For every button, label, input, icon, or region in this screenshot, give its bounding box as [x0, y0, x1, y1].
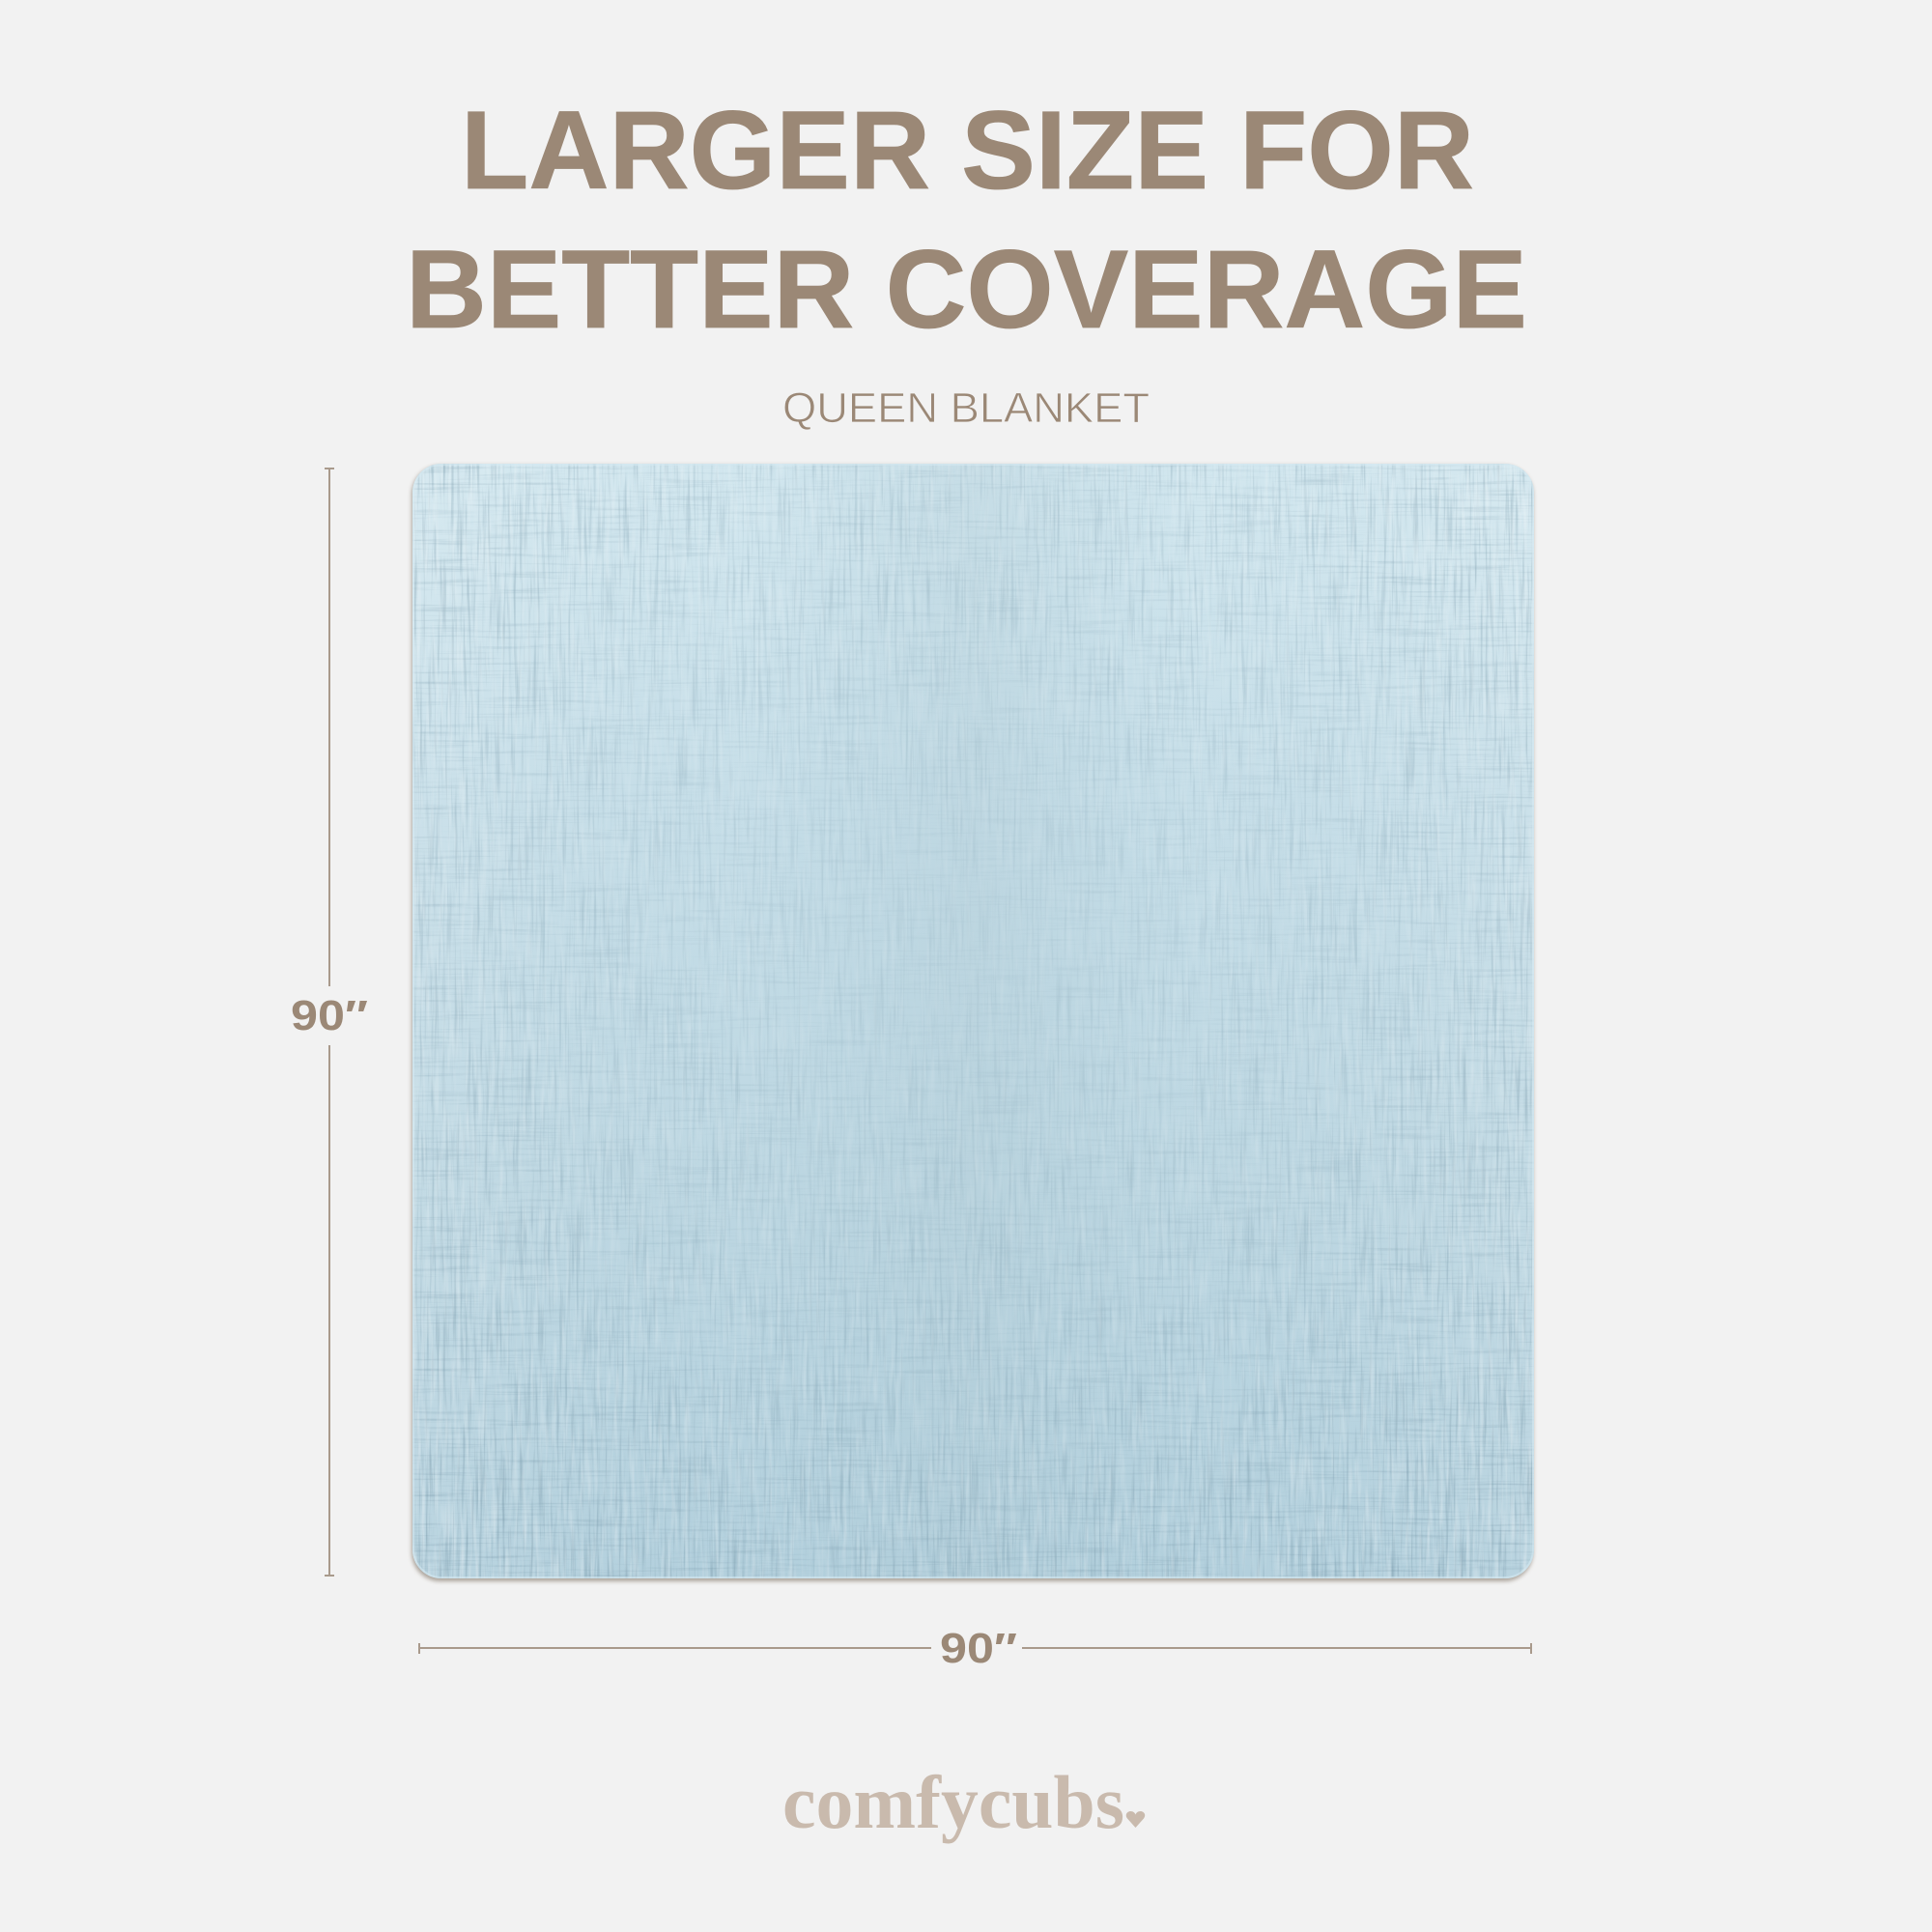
- logo wordmark: comfycubs: [782, 1760, 1124, 1844]
- logo: [782, 1760, 1145, 1844]
- title line 2: BETTER COVERAGE: [406, 227, 1527, 352]
- height label: 90″: [291, 992, 368, 1039]
- subtitle: QUEEN BLANKET: [782, 385, 1150, 432]
- icon: heart: [1126, 1811, 1145, 1828]
- width label: 90″: [940, 1625, 1017, 1672]
- blanket: [412, 464, 1534, 1581]
- title: [406, 88, 1527, 352]
- title line 1: LARGER SIZE FOR: [461, 88, 1474, 213]
